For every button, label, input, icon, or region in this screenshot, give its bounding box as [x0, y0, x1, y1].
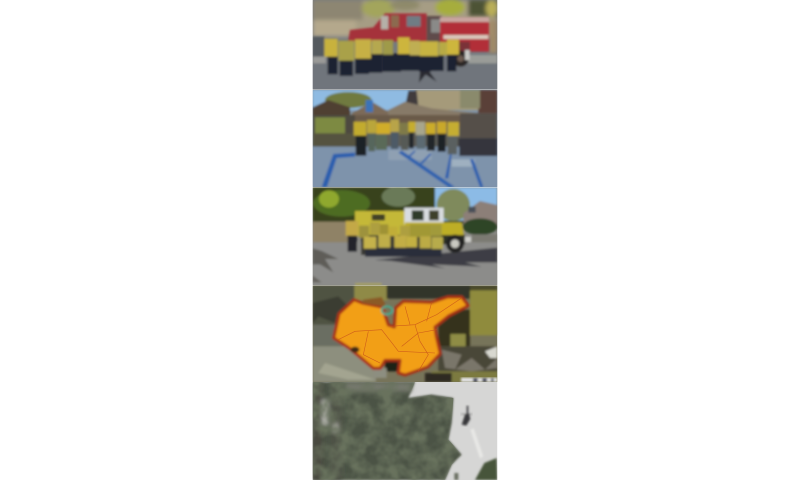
map scale bar: [461, 378, 497, 382]
fire perimeter: [334, 297, 468, 375]
photo 4: satellite map with orange fire perimeter: [313, 285, 497, 382]
tree foliage texture: [313, 382, 466, 480]
truck number: 333: [373, 216, 384, 222]
photo 1: crew with red fire engine: [313, 0, 498, 90]
photo 3: crew with yellow fire truck: [313, 187, 497, 285]
photo 5: helicopter water drop over trees: [313, 382, 497, 480]
photo 2: crew on parking lot with blue lines: [313, 90, 497, 187]
icon: helicopter: [461, 406, 472, 426]
